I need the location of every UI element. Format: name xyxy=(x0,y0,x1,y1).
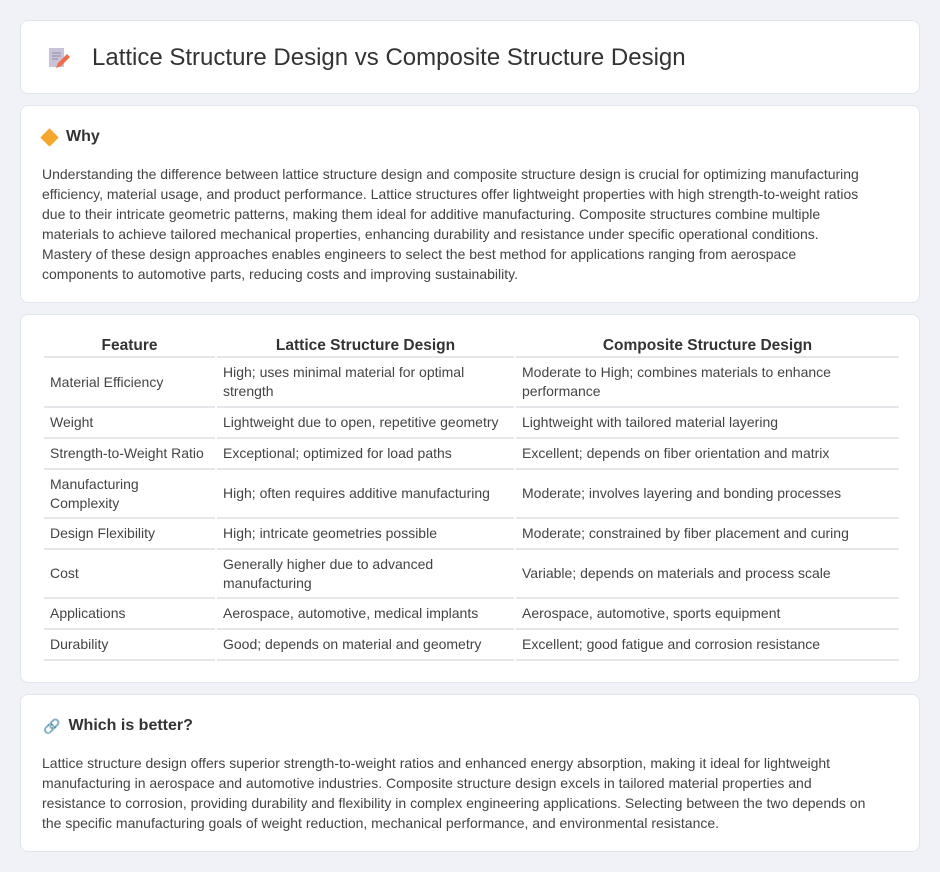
table: Generally higher due to advanced manufacturing xyxy=(223,556,433,590)
table: Moderate; involves layering and bonding processes xyxy=(522,485,841,501)
heading: which is better: 🔗 xyxy=(43,718,60,734)
table: Composite Structure Design xyxy=(603,336,812,354)
table: Applications xyxy=(50,605,126,621)
heading: why xyxy=(40,128,100,147)
table: Excellent; good fatigue and corrosion resistance xyxy=(522,636,820,652)
table: Variable; depends on materials and process scale xyxy=(522,565,831,581)
table: High; uses minimal material for optimal strength xyxy=(223,364,464,399)
table: Material Efficiency xyxy=(50,374,163,390)
table: Lightweight due to open, repetitive geometry xyxy=(223,414,499,430)
table: Feature xyxy=(102,336,158,354)
table: High; intricate geometries possible xyxy=(223,525,437,541)
table: Durability xyxy=(50,636,108,652)
table: Lightweight with tailored material layering xyxy=(522,414,778,430)
table: High; often requires additive manufacturing xyxy=(223,485,490,501)
panel: which is better xyxy=(20,694,920,852)
table: Exceptional; optimized for load paths xyxy=(223,445,452,461)
panel: comparison table xyxy=(20,314,920,683)
icon: document pencil xyxy=(49,48,70,68)
text: which body: Lattice structure design offers superior strength-to-weight ratios and enhanced energy absorption, making it ideal for lightweight manufacturing in aerospace and automotive industries. Composite structure design excels in tailored material properties and resistance to corrosion, providing durability and flexibility in complex engineering applications. Selecting between the two depends on the specific manufacturing goals of weight reduction, mechanical performance, and environmental resistance. xyxy=(42,755,865,831)
table: Cost xyxy=(50,565,79,581)
table: Weight xyxy=(50,414,93,430)
table xyxy=(44,336,899,661)
table: Aerospace, automotive, sports equipment xyxy=(522,605,780,621)
title: Lattice Structure Design vs Composite Structure Design xyxy=(92,44,686,71)
panel: why xyxy=(20,105,920,303)
table: Moderate to High; combines materials to enhance performance xyxy=(522,364,831,399)
table: Good; depends on material and geometry xyxy=(223,636,481,652)
table: Aerospace, automotive, medical implants xyxy=(223,605,478,621)
header card xyxy=(20,20,920,94)
heading: which is better: Which is better? xyxy=(68,717,193,734)
heading: why: Why xyxy=(66,128,100,145)
text: why body: Understanding the difference between lattice structure design and composite structure design is crucial for optimizing manufacturing efficiency, material usage, and product performance. Lattice structures offer lightweight properties with high strength-to-weight ratios due to their intricate geometric patterns, making them ideal for additive manufacturing. Composite structures combine multiple materials to achieve tailored mechanical properties, enhancing durability and resistance under specific operational conditions. Mastery of these design approaches enables engineers to select the best method for applications ranging from aerospace components to automotive parts, reducing costs and improving sustainability. xyxy=(42,166,859,282)
table: Design Flexibility xyxy=(50,525,155,541)
table: Lattice Structure Design xyxy=(276,336,455,354)
table: Moderate; constrained by fiber placement and curing xyxy=(522,525,849,541)
table: Manufacturing Complexity xyxy=(50,476,139,510)
table: Strength-to-Weight Ratio xyxy=(50,445,204,461)
table: Excellent; depends on fiber orientation and matrix xyxy=(522,445,829,461)
